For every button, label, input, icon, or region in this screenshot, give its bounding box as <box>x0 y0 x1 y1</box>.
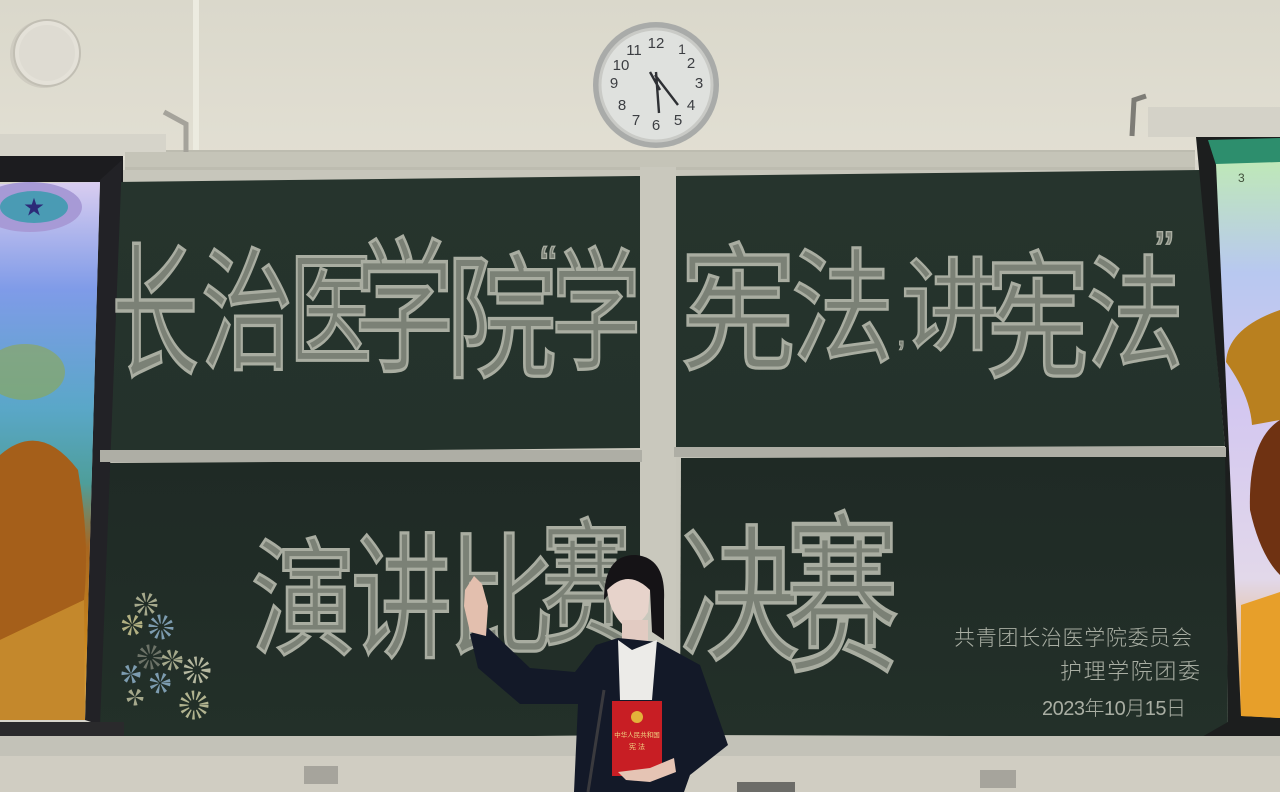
wall clock: 8 <box>618 97 626 114</box>
heading: first line left board: “ <box>540 235 557 297</box>
lower hand <box>618 758 676 782</box>
left projection screen <box>0 155 124 740</box>
shirt <box>618 640 657 700</box>
middle chalk rail left <box>100 450 642 462</box>
right projector bracket <box>1132 96 1146 136</box>
heading: first line left board: 学 <box>354 228 454 392</box>
wall clock: 4 <box>687 97 695 114</box>
heading: first line left board: 院 <box>446 245 557 397</box>
panel: lower right blackboard <box>680 456 1228 737</box>
wall clock: 3 <box>695 75 703 92</box>
wall clock: 9 <box>610 75 618 92</box>
heading: second line: 赛 <box>541 510 631 664</box>
vertical divider rail <box>640 162 676 742</box>
heading: second line: 决 <box>680 517 800 680</box>
wall clock: 7 <box>632 112 640 129</box>
hair <box>604 555 664 640</box>
wall clock: 2 <box>687 55 695 72</box>
top horizontal rail <box>125 152 1195 167</box>
wall background <box>0 0 1280 160</box>
chalk flower decoration <box>126 597 206 715</box>
neck <box>622 620 648 644</box>
heading: first line right board: 法 <box>791 241 894 379</box>
panel: upper left blackboard <box>104 176 640 453</box>
heading: first line right board <box>680 219 1184 396</box>
heading: first line right board: , <box>896 312 907 354</box>
raised hand <box>464 576 488 636</box>
blackboard frame <box>95 150 1230 740</box>
wall clock: 10 <box>613 57 629 74</box>
heading: first line left board <box>112 228 641 398</box>
heading: first line left board: 学 <box>551 240 641 388</box>
microphone <box>588 690 604 792</box>
panel: upper right blackboard <box>675 170 1225 448</box>
organiser signature: 护理学院团委 <box>1060 659 1200 684</box>
heading: first line left board: 治 <box>201 239 293 388</box>
heading: first line left board: 长 <box>112 233 198 398</box>
wall clock: 6 <box>652 117 660 134</box>
wall clock <box>593 22 719 148</box>
heading: first line right board: 宪 <box>680 236 796 389</box>
right projection screen: 3 <box>1238 171 1245 185</box>
lower wall strip <box>0 740 1280 792</box>
face <box>607 579 650 626</box>
constitution booklet: 宪 法 <box>629 742 645 751</box>
heading: second line: 演 <box>251 529 356 672</box>
right projection screen <box>1148 107 1280 738</box>
bottom chalk tray <box>0 736 1280 756</box>
panel: lower left blackboard <box>98 460 640 740</box>
left projection screen: ★ <box>24 197 44 219</box>
icon: round ceiling speaker <box>10 20 80 88</box>
heading: first line right board: 法 <box>1086 246 1184 385</box>
middle chalk rail right <box>674 447 1226 457</box>
wall clock: 1 <box>678 41 686 57</box>
constitution booklet: 中华人民共和国 <box>614 730 660 739</box>
heading: second line: 讲 <box>351 526 452 677</box>
heading: second line <box>251 502 899 696</box>
tray brackets <box>304 766 1016 792</box>
organiser signature: 2023年10月15日 <box>1042 697 1186 720</box>
wall clock: 11 <box>626 42 642 59</box>
wall panel seam <box>193 0 199 150</box>
wall clock: 5 <box>674 112 682 129</box>
heading: first line right board: 宪 <box>986 242 1089 396</box>
heading: second line: 赛 <box>785 502 899 696</box>
heading: first line right board: ” <box>1155 219 1174 282</box>
heading: first line right board: 讲 <box>901 252 999 364</box>
speaker <box>464 555 728 792</box>
heading: first line left board: 医 <box>289 243 372 382</box>
heading: second line: 比 <box>448 524 555 673</box>
jacket <box>470 628 728 792</box>
wall clock: 12 <box>648 35 664 52</box>
organiser signature <box>954 627 1200 720</box>
constitution booklet <box>612 701 662 776</box>
left projector bracket <box>0 112 186 156</box>
organiser signature: 共青团长治医学院委员会 <box>954 627 1192 650</box>
